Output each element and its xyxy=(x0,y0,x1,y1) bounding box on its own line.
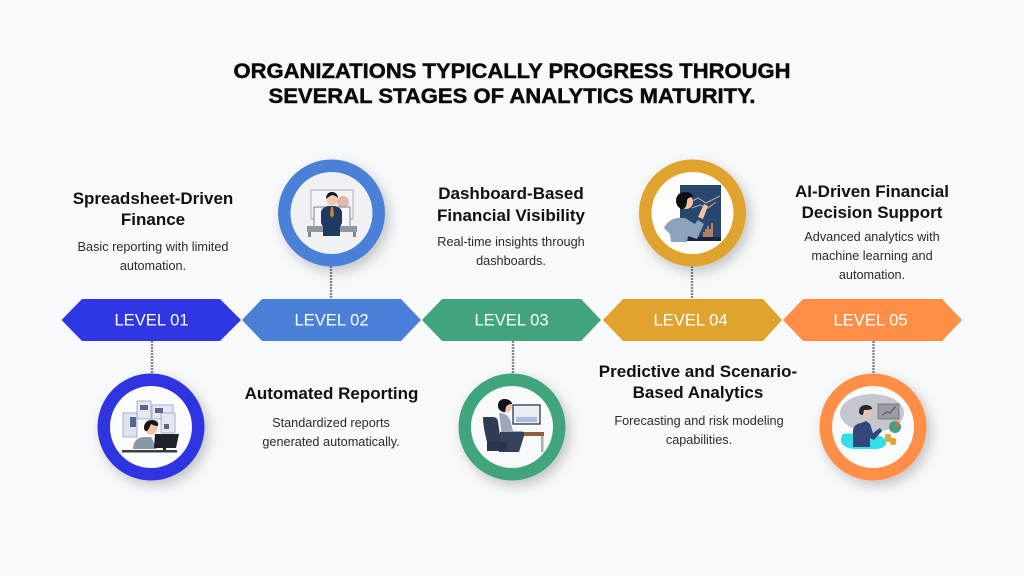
panel: level 02 xyxy=(242,160,421,449)
arrow banner: level 01 xyxy=(62,299,241,341)
connector: level 04 xyxy=(691,266,693,299)
heading: predictive and scenario-based analytics xyxy=(599,362,797,402)
heading: ai-driven financial decision support: AI-Driven Financial xyxy=(795,182,949,201)
heading: automated reporting: Automated Reporting xyxy=(245,384,418,403)
text: level 01 description xyxy=(78,240,228,273)
text: level 05 description: automation. xyxy=(839,268,905,282)
text: level 02 description: generated automatically. xyxy=(262,435,400,449)
text: level 01 description: automation. xyxy=(120,259,186,273)
arrow banner: level 05: LEVEL 05 xyxy=(833,310,908,330)
heading: predictive and scenario-based analytics: Predictive and Scenario- xyxy=(599,362,797,381)
title: ORGANIZATIONS TYPICALLY PROGRESS THROUGH xyxy=(234,60,790,83)
arrow banner: level 03 xyxy=(422,299,601,341)
text: level 03 description xyxy=(437,235,585,268)
heading: spreadsheet-driven finance: Finance xyxy=(121,210,185,229)
text: level 02 description xyxy=(262,416,400,449)
heading: predictive and scenario-based analytics: Based Analytics xyxy=(633,383,763,402)
text: level 03 description: Real-time insights through xyxy=(437,235,585,249)
connector: level 03 xyxy=(512,341,514,374)
icon: manager in front of screens xyxy=(278,160,385,266)
connector: level 05 xyxy=(872,341,875,374)
heading: ai-driven financial decision support: Decision Support xyxy=(802,203,943,222)
arrow banner: level 04: LEVEL 04 xyxy=(653,310,728,330)
arrow banner: level 04 xyxy=(603,299,782,341)
icon: analyst pointing at chart board xyxy=(639,160,746,266)
icon: advisor with chart and coins xyxy=(820,374,926,480)
heading: dashboard-based financial visibility xyxy=(437,184,586,225)
connector: level 02 xyxy=(330,266,332,299)
text: level 04 description xyxy=(614,414,784,447)
arrow banner: level 02: LEVEL 02 xyxy=(294,310,369,330)
text: level 02 description: Standardized reports xyxy=(272,416,390,430)
panel: level 04 xyxy=(599,160,797,447)
text: level 04 description: capabilities. xyxy=(666,433,732,447)
icon: analyst with reports at computer xyxy=(98,374,204,480)
panel: level 01 xyxy=(62,189,241,480)
title: SEVERAL STAGES OF ANALYTICS MATURITY. xyxy=(268,85,756,108)
heading: ai-driven financial decision support xyxy=(795,182,949,222)
icon: person at dashboard desk xyxy=(458,374,566,480)
heading: spreadsheet-driven finance: Spreadsheet-Driven xyxy=(73,189,233,208)
text: level 05 description: machine learning and xyxy=(811,249,933,263)
connector: level 01 xyxy=(151,341,153,374)
title xyxy=(234,60,790,108)
heading: dashboard-based financial visibility: Financial Visibility xyxy=(437,206,586,225)
text: level 01 description: Basic reporting with limited xyxy=(78,240,228,254)
arrow banner: level 03: LEVEL 03 xyxy=(474,310,549,330)
arrow banner: level 02 xyxy=(242,299,421,341)
text: level 03 description: dashboards. xyxy=(476,254,546,268)
text: level 04 description: Forecasting and risk modeling xyxy=(614,414,784,428)
text: level 05 description: Advanced analytics with xyxy=(804,230,940,244)
heading: spreadsheet-driven finance xyxy=(73,189,233,229)
panel: level 05 xyxy=(783,182,962,480)
text: level 05 description xyxy=(804,230,940,282)
heading: dashboard-based financial visibility: Dashboard-Based xyxy=(438,184,584,203)
arrow banner: level 05 xyxy=(783,299,962,341)
panel: level 03 xyxy=(422,184,601,480)
arrow banner: level 01: LEVEL 01 xyxy=(114,310,189,330)
